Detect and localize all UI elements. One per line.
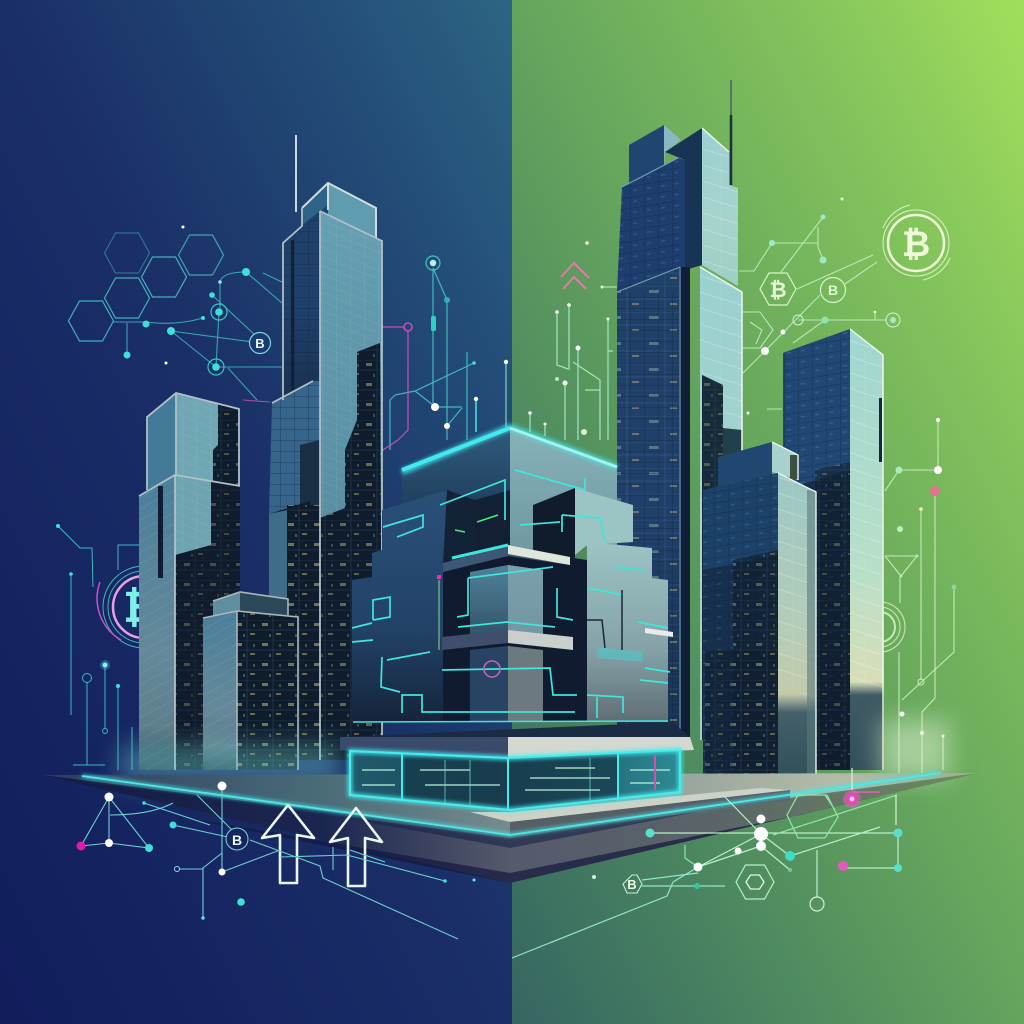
building: left tower: [139, 393, 240, 770]
right hexagon bitcoin icon: ₿: [769, 279, 787, 302]
cube circuit traces: [352, 470, 670, 722]
lower left network: B: [232, 832, 242, 848]
building: central cyber cube: [340, 427, 694, 810]
left network: B node: [250, 332, 270, 354]
left network: B node: B: [255, 336, 265, 351]
right circle B icon: [820, 278, 846, 302]
right side links and ring: [855, 418, 956, 777]
building: right middle tower: [703, 442, 816, 788]
left bitcoin ring: [56, 524, 185, 715]
lower right network: [512, 768, 902, 958]
center network: lines rising from the cube: [380, 241, 617, 452]
cube pale ledges: [442, 545, 673, 662]
platform: [42, 773, 978, 883]
cube base slab: [340, 722, 690, 742]
cube top edges: [402, 428, 510, 470]
right network: upper links: [739, 198, 900, 414]
cube glowing lobby: [350, 750, 680, 810]
ground haze glow: [120, 720, 950, 785]
left lower-stems: [73, 660, 132, 770]
arrow: second up arrow: [330, 808, 382, 886]
left network: nodes and lines: [113, 226, 282, 402]
right bitcoin large: ₿: [902, 225, 930, 264]
background: right green panel: [512, 0, 1024, 1024]
right circle B icon: B: [828, 282, 838, 298]
arrow: first up arrow: [262, 805, 314, 883]
left bitcoin ring: ₿: [123, 583, 159, 632]
right pink chevrons: [561, 263, 589, 289]
background: left navy panel: [0, 0, 512, 1024]
left network: hexagons: [68, 233, 224, 341]
right bitcoin large: [883, 205, 950, 280]
building: right tall tower: [617, 80, 742, 740]
building: left tall tower: [269, 135, 382, 760]
building: small left block: [203, 592, 298, 770]
building: right far tower: [783, 329, 884, 770]
cube top edge glow: [402, 427, 617, 472]
right hexagon bitcoin icon: [760, 273, 796, 305]
lower left network: [76, 782, 476, 939]
lower right network: B: [627, 877, 637, 892]
